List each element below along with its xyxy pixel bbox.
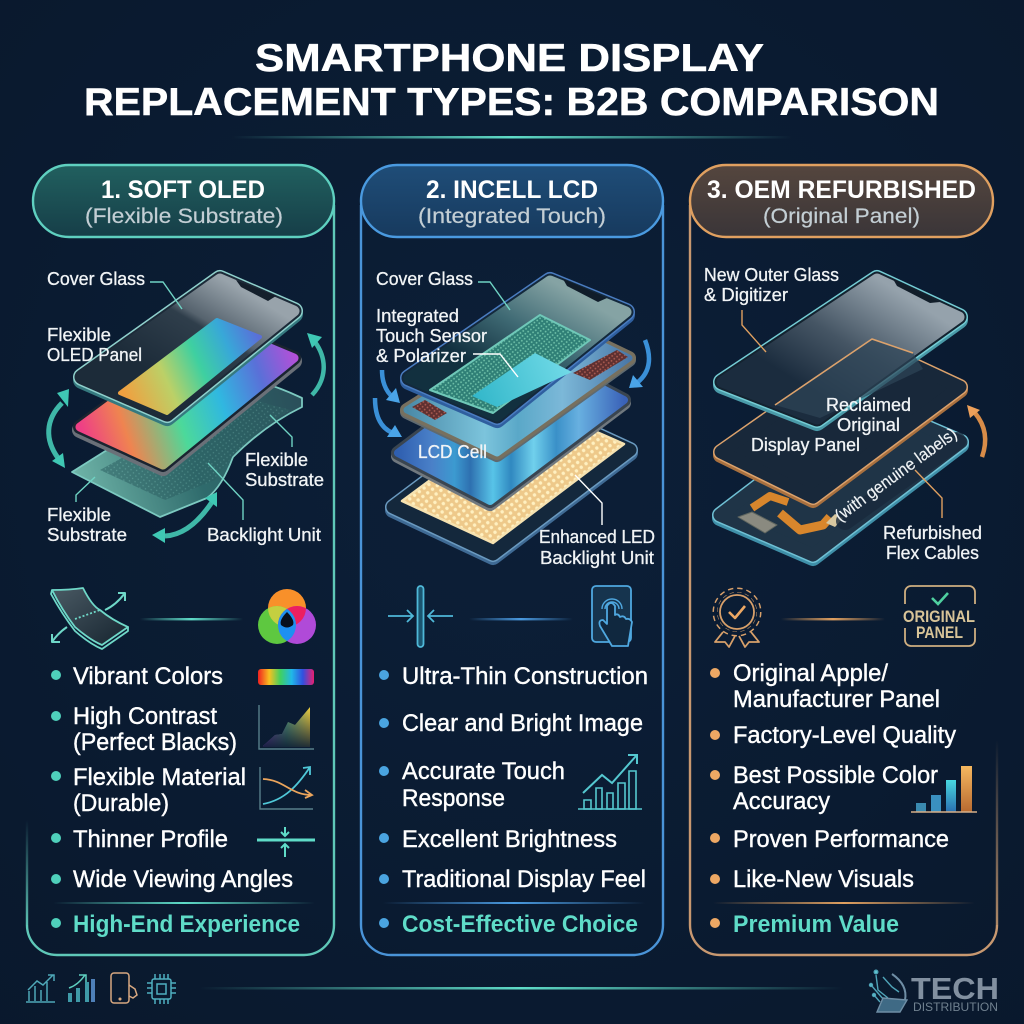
logo: tech distribution [870,970,999,1014]
icon: rgb circles [258,589,316,644]
panel outline [690,205,997,955]
icon: original panel badge: PANEL [916,623,963,642]
label: flexible oled panel [47,325,142,365]
bullet list: soft oled [51,663,293,893]
header: incell lcd [361,165,663,237]
bullet list: oem refurbished: Manufacturer Panel [733,686,940,713]
arrow: right [629,340,649,388]
logo: tech distribution: DISTRIBUTION [913,1000,998,1014]
logo: tech distribution: TECH [911,971,999,1006]
bullet list: incell lcd: Ultra-Thin Construction [402,663,648,690]
label: flexible substrate left: Flexible [47,505,111,525]
icon: line chart [26,975,55,1002]
label: refurbished flex cables: Flex Cables [886,543,979,563]
exploded diagram: oem layers [720,279,961,558]
bullet list: soft oled: Thinner Profile [73,826,228,853]
bullet list: incell lcd: Clear and Bright Image [402,710,643,737]
label: enhanced led backlight unit: Backlight Unit [540,548,654,568]
label: reclaimed original display panel: Display Panel [751,435,860,455]
panel: incell lcd [361,165,663,955]
label: reclaimed original display panel: Reclaimed [826,395,911,415]
label: flexible substrate right [245,415,324,490]
exploded diagram: oled layers [72,279,302,517]
label: lcd cell: LCD Cell [418,442,487,462]
layer: lcd cell [398,352,624,504]
label: cover glass: Cover Glass [376,269,473,289]
bullet list: soft oled: Flexible Material [73,764,246,791]
icon: rainbow bar [258,669,314,685]
header: soft oled: 1. SOFT OLED [101,176,265,204]
label: cover glass [376,269,510,310]
logo mark [870,970,907,1012]
exploded diagram: lcd layers [393,279,630,557]
layer: flex cables base [720,402,961,558]
label: flexible substrate right: Substrate [245,470,324,490]
label: flexible oled panel: OLED Panel [47,345,142,365]
highlight: cost-effective choice: Cost-Effective Choice [402,911,638,938]
layer: cover glass [409,279,626,419]
layer: flexible substrate [72,376,302,517]
bullet list: incell lcd: Traditional Display Feel [402,866,646,893]
label: new outer glass and digitizer: New Outer Glass [704,265,839,285]
label: integrated touch sensor and polarizer: & Polarizer [376,346,466,366]
icon: touch panel [592,586,632,646]
label: enhanced led backlight unit: Enhanced LED [539,527,655,547]
chart: color accuracy bars [911,766,977,812]
icon: bar chart [68,975,95,1002]
panel outline [361,205,663,955]
bullet list: incell lcd: Accurate Touch [402,758,565,785]
arrow: left upper [382,370,400,403]
chart: flexible lines [260,767,313,809]
arrow: bottom flex [152,492,217,543]
label: cover glass [47,269,182,309]
arrow: right flex [307,333,324,395]
bullet list: incell lcd: Response [402,785,505,812]
label: refurbished flex cables [883,470,982,563]
arrow: left flex [49,389,69,468]
label: integrated touch sensor and polarizer: Touch Sensor [376,326,487,346]
header: oem refurbished: (Original Panel) [763,205,920,228]
arrow: left lower [375,398,402,437]
bullet list: soft oled: High Contrast [73,703,217,730]
label: flexible substrate right: Flexible [245,450,308,470]
header: soft oled [33,165,334,237]
label: integrated touch sensor and polarizer: Integrated [376,306,459,326]
layer: outer glass [722,279,959,422]
header: soft oled: (Flexible Substrate) [85,205,283,228]
bullet list: oem refurbished: Factory-Level Quality [733,722,956,749]
panel: oem refurbished [690,165,997,955]
icon: rosette [715,590,759,647]
header: oem refurbished [690,165,993,237]
highlight: high-end experience: High-End Experience [73,911,300,938]
label: flexible oled panel: Flexible [47,325,111,345]
label: new outer glass and digitizer: & Digitizer [704,285,788,305]
label: backlight unit: Backlight Unit [207,525,321,545]
label: reclaimed original display panel [751,395,911,455]
layer: cover glass [82,279,294,417]
title [84,37,939,124]
label on base: with genuine labels: (with genuine labels) [831,424,960,525]
icon: thin profile [257,827,315,857]
bullet list: oem refurbished: Best Possible Color [733,762,938,789]
bullet list: oem refurbished: Accuracy [733,788,830,815]
label: reclaimed original display panel: Original [837,415,900,435]
layer: touch sensor [407,320,629,455]
layer: oled panel [80,326,294,468]
chart: high contrast area [259,705,314,749]
bullet list: oem refurbished: Original Apple/ [733,660,888,687]
panel outline [27,205,334,955]
layer: led backlight [393,404,630,557]
label: flexible substrate left: Substrate [47,525,127,545]
header: incell lcd: (Integrated Touch) [418,205,606,228]
label: cover glass: Cover Glass [47,269,145,289]
title: SMARTPHONE DISPLAY [255,37,764,80]
icon: original panel badge [903,586,975,646]
bullet list: oem refurbished [710,660,956,893]
icon: chip [147,974,176,1004]
footer icons [26,973,176,1004]
arrow: orange [967,405,985,457]
title: REPLACEMENT TYPES: B2B COMPARISON [84,81,939,124]
bullet list: soft oled: Wide Viewing Angles [73,866,293,893]
label: enhanced led backlight unit [539,475,655,568]
chart: touch response [578,755,642,809]
label: new outer glass and digitizer [704,265,839,352]
label: backlight unit [207,463,321,545]
header: incell lcd: 2. INCELL LCD [426,176,598,204]
header: oem refurbished: 3. OEM REFURBISHED [707,176,976,204]
icon: original panel badge: ORIGINAL [903,607,975,626]
label: integrated touch sensor and polarizer [376,306,518,377]
bullet list: oem refurbished: Like-New Visuals [733,866,914,893]
label: refurbished flex cables: Refurbished [883,523,982,543]
icon: flexible sheet [51,588,128,649]
label: flexible substrate left [47,477,127,545]
bullet list: incell lcd [379,663,648,893]
bullet list: soft oled: (Perfect Blacks) [73,729,237,756]
layer: reclaimed display panel [721,346,960,500]
bullet list: soft oled: (Durable) [73,790,169,817]
bullet list: incell lcd: Excellent Brightness [402,826,617,853]
panel: soft oled [27,165,334,955]
icon: phone [111,973,137,1003]
highlight: premium value: Premium Value [733,911,899,938]
icon: ultra-thin [388,586,453,647]
bullet list: oem refurbished: Proven Performance [733,826,949,853]
bullet list: soft oled: Vibrant Colors [73,663,223,690]
